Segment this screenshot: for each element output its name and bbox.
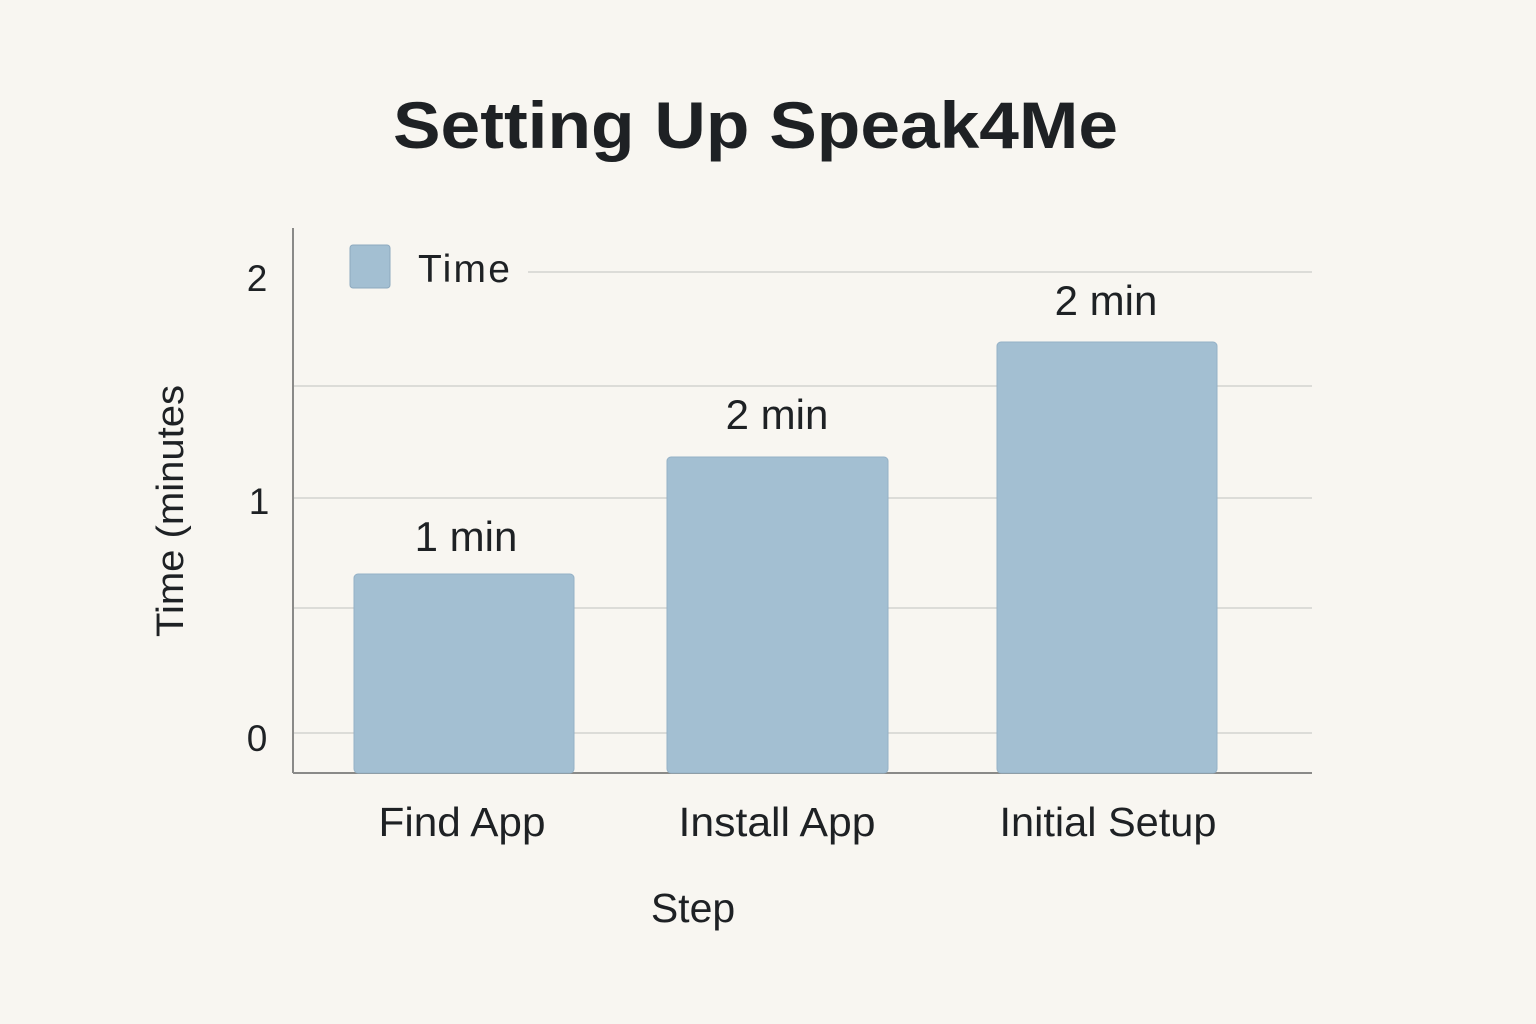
x labels bbox=[378, 799, 1216, 845]
title: Setting Up Speak4Me bbox=[393, 88, 1118, 162]
y tick labels: 2 bbox=[247, 258, 267, 299]
x labels: Find App bbox=[378, 799, 546, 845]
axes bbox=[293, 228, 1312, 773]
legend: Time bbox=[418, 248, 510, 291]
bar: Install App bbox=[667, 391, 888, 773]
bar: Install App: 2 min bbox=[726, 391, 828, 438]
y axis title: Time (minutes bbox=[150, 385, 192, 637]
y tick labels: 0 bbox=[247, 718, 267, 759]
x labels: Initial Setup bbox=[1000, 799, 1216, 845]
bar: Find App: 1 min bbox=[415, 513, 517, 560]
bar: Find App bbox=[354, 513, 574, 773]
x axis title: Step bbox=[651, 885, 735, 931]
legend bbox=[350, 245, 510, 291]
bar: Initial Setup: 2 min bbox=[1055, 277, 1157, 324]
y tick labels: 1 bbox=[249, 481, 269, 522]
x labels: Install App bbox=[678, 799, 876, 845]
y tick labels bbox=[247, 258, 269, 759]
bar: Initial Setup bbox=[997, 277, 1217, 773]
